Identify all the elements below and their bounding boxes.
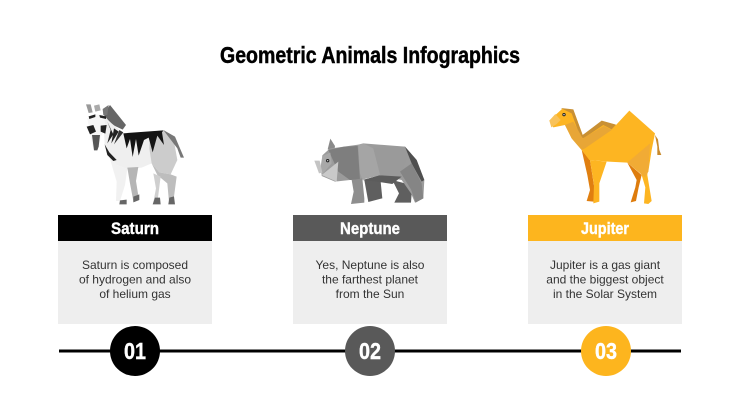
text block: Saturn: Saturn is composed bbox=[82, 258, 188, 272]
text block: Neptune bbox=[293, 241, 447, 324]
text block: Jupiter: and the biggest object bbox=[546, 272, 664, 286]
text block: Jupiter bbox=[528, 241, 682, 324]
marker: 03: 03 bbox=[595, 338, 617, 364]
title: Geometric Animals Infographics bbox=[220, 42, 520, 68]
marker: 01 bbox=[110, 326, 160, 376]
header: Saturn bbox=[58, 215, 212, 241]
marker: 02: 02 bbox=[359, 338, 381, 364]
marker: 03 bbox=[581, 326, 631, 376]
text block: Neptune: Yes, Neptune is also bbox=[316, 258, 425, 272]
panel: Saturn bbox=[58, 215, 212, 324]
panel: Neptune bbox=[293, 215, 447, 324]
text block: Saturn bbox=[58, 241, 212, 324]
header: Neptune: Neptune bbox=[340, 219, 400, 238]
header: Jupiter bbox=[528, 215, 682, 241]
icon: camel bbox=[549, 108, 661, 204]
text block: Saturn: of helium gas bbox=[99, 287, 171, 301]
marker: 01: 01 bbox=[124, 338, 146, 364]
text block: Neptune: the farthest planet bbox=[322, 272, 419, 286]
text block: Jupiter: Jupiter is a gas giant bbox=[550, 258, 661, 272]
header: Saturn: Saturn bbox=[111, 219, 159, 238]
icon: rhino bbox=[314, 139, 424, 204]
panel: Jupiter bbox=[528, 215, 682, 324]
header: Neptune bbox=[293, 215, 447, 241]
timeline line bbox=[59, 350, 681, 352]
text block: Saturn: of hydrogen and also bbox=[79, 272, 191, 286]
text block: Neptune: from the Sun bbox=[336, 287, 404, 301]
text block: Jupiter: in the Solar System bbox=[553, 287, 657, 301]
marker: 02 bbox=[345, 326, 395, 376]
icon: zebra bbox=[86, 104, 184, 204]
header: Jupiter: Jupiter bbox=[581, 219, 629, 238]
